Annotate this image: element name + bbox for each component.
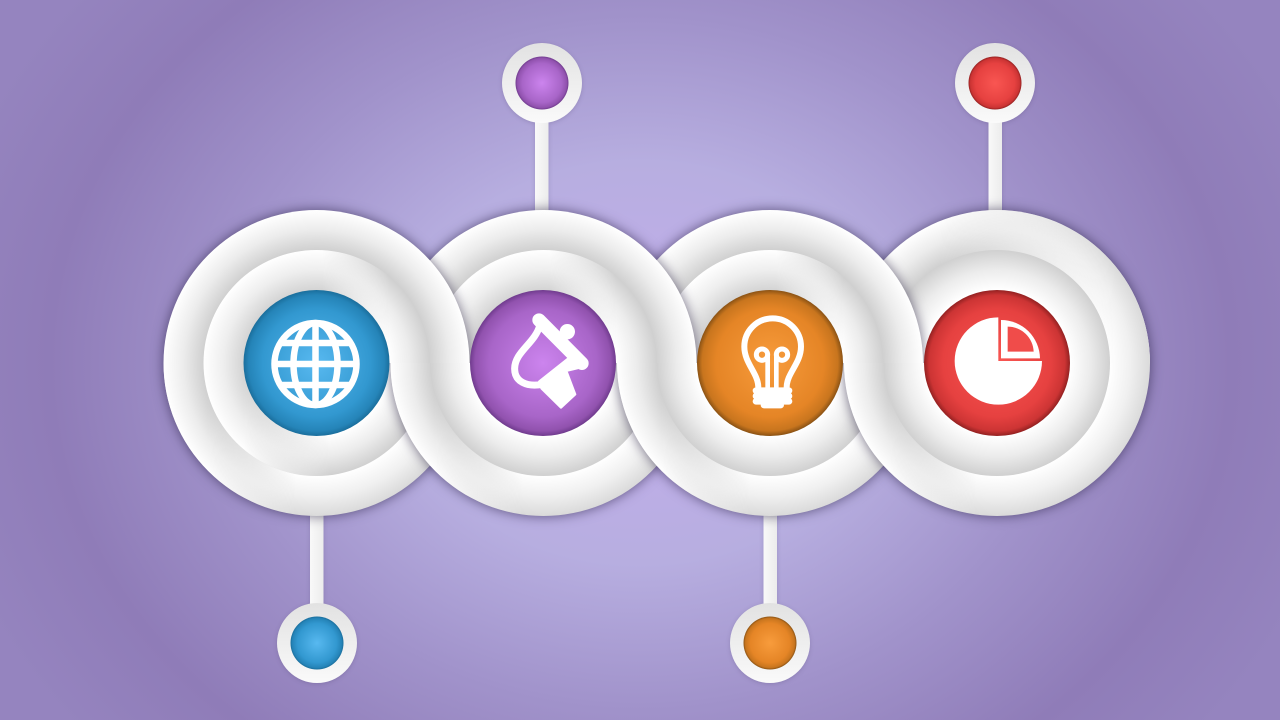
icon: light bulb [744, 318, 801, 405]
orange disc [697, 290, 843, 436]
icon: megaphone [515, 320, 586, 407]
icon: pie chart [955, 317, 1042, 405]
ring 2 lower [384, 363, 662, 524]
connector: blue node [277, 510, 357, 683]
red disc [924, 290, 1070, 436]
icon: globe [274, 323, 356, 405]
purple disc [470, 290, 616, 436]
woven rings: upper halves [156, 201, 1158, 363]
ring 4 upper [879, 201, 1158, 363]
ring 3 upper [652, 202, 930, 363]
connector: purple node [502, 43, 582, 215]
ring 1 lower [156, 363, 434, 525]
ring 2 upper [426, 201, 702, 363]
blue disc [244, 290, 390, 436]
woven rings: lower halves [156, 363, 1158, 525]
connector: red node [955, 43, 1035, 215]
connector: orange node [730, 510, 810, 683]
ring 4 lower [838, 363, 1158, 524]
ring 3 lower [610, 363, 888, 525]
ring 1 upper [156, 202, 476, 363]
